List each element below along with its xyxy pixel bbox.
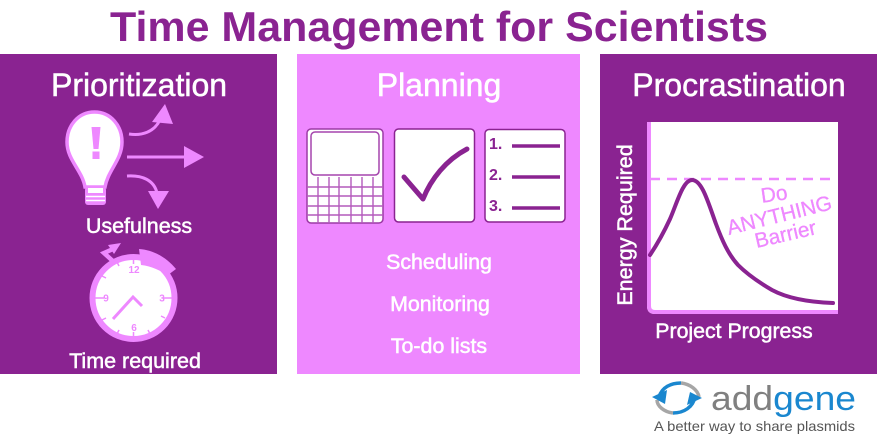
icon: stopwatch: 9 (103, 294, 109, 304)
label: scheduling: Scheduling (386, 250, 492, 274)
label: time required: Time required (69, 349, 201, 373)
label: monitoring: Monitoring (390, 292, 490, 316)
icon: numbered list: 1. (489, 136, 502, 153)
tagline: A better way to share plasmids (654, 418, 855, 434)
arrow: straight (127, 146, 204, 168)
heading: procrastination: Procrastination (632, 67, 846, 103)
icon: check mark (394, 129, 474, 222)
annotation: do anything barrier: ANYTHING (725, 192, 834, 240)
axis label: energy required: Energy Required (613, 144, 637, 306)
icon: numbered list: 3. (489, 198, 502, 215)
axis label: project progress: Project Progress (655, 319, 813, 343)
panel: prioritization (0, 54, 277, 374)
logo: addgene (652, 380, 856, 434)
wordmark: addgene (711, 380, 856, 418)
icon: numbered list (485, 130, 565, 222)
icon: stopwatch: 3 (159, 294, 165, 304)
icon: stopwatch: 6 (131, 323, 137, 334)
annotation: do anything barrier (725, 181, 834, 253)
panel: planning (297, 54, 580, 374)
annotation: do anything barrier: Barrier (753, 216, 819, 253)
chart: energy barrier curve (647, 122, 838, 314)
icon: stopwatch (92, 243, 176, 339)
panel: procrastination (600, 54, 877, 374)
icon: cycle arrows (652, 383, 702, 413)
arrow: up (129, 104, 173, 134)
arrow: down (127, 176, 169, 209)
icon: light bulb (67, 112, 122, 205)
icon: numbered list: 2. (489, 167, 502, 184)
annotation: do anything barrier: Do (759, 181, 789, 208)
label: usefulness: Usefulness (86, 214, 192, 238)
icon: stopwatch: 12 (128, 265, 140, 276)
heading: planning: Planning (377, 67, 501, 103)
heading: prioritization: Prioritization (51, 67, 227, 103)
title: Time Management for Scientists (110, 3, 768, 50)
icon: calendar (307, 129, 383, 223)
label: to-do lists: To-do lists (391, 334, 487, 358)
